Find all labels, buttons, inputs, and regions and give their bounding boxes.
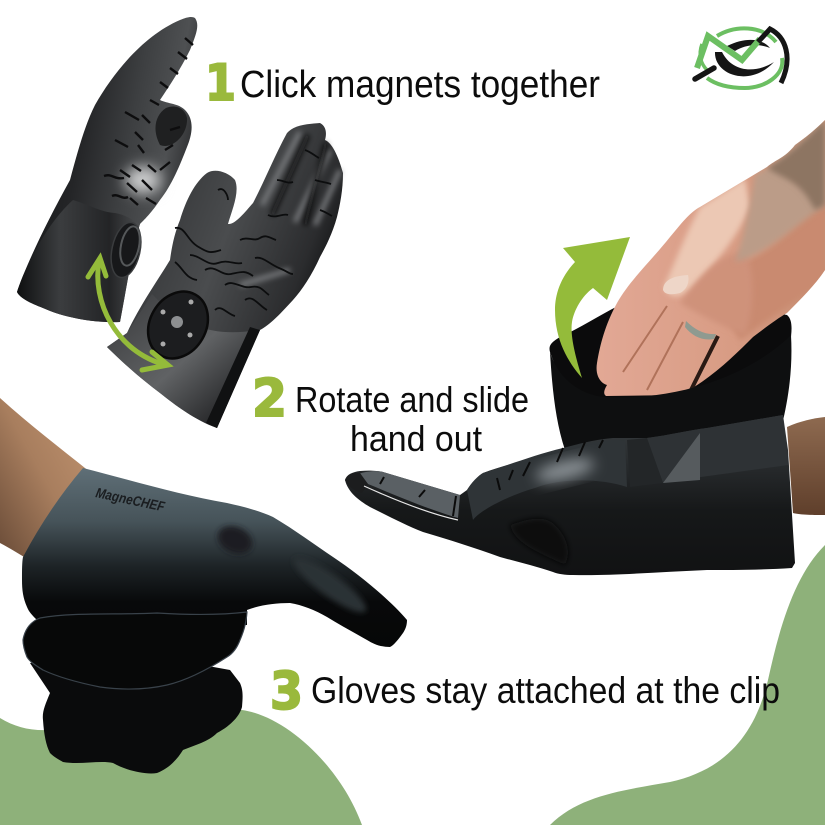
glove: horizontal pointing left <box>345 415 795 575</box>
glove: lower left hand <box>22 468 407 647</box>
glove: upper left in profile <box>17 17 197 322</box>
step 2 heading: hand out <box>350 418 482 459</box>
step 3 heading: 3 <box>270 662 303 722</box>
step 3 heading <box>270 662 780 722</box>
background blob: bottom left <box>0 709 362 825</box>
step 1 heading: Click magnets together <box>240 64 600 106</box>
brand text: MagneCHEF <box>94 484 167 515</box>
arrow: curved up green <box>555 237 630 378</box>
step 1 heading: 1 <box>205 54 236 112</box>
logo icon <box>695 28 787 88</box>
step 2 heading <box>252 369 529 459</box>
glove: cuff front wall <box>550 335 791 450</box>
arrow: rotate double-headed <box>88 258 168 370</box>
glove: lower left cuff <box>23 612 247 689</box>
step 3 heading: Gloves stay attached at the clip <box>311 670 780 711</box>
glove: lower right palm up <box>107 123 343 428</box>
forearm: left edge <box>0 398 90 560</box>
background blob: bottom right <box>550 545 825 825</box>
glove: lower hand lower part behind cuff <box>30 650 243 773</box>
glove: open cuff interior behind hand <box>549 306 792 420</box>
hand: upper right with ring <box>597 120 825 396</box>
step 2 heading: Rotate and slide <box>295 379 529 420</box>
forearm: right edge <box>787 417 825 515</box>
step 2 heading: 2 <box>252 369 287 429</box>
step 1 heading <box>205 54 600 112</box>
